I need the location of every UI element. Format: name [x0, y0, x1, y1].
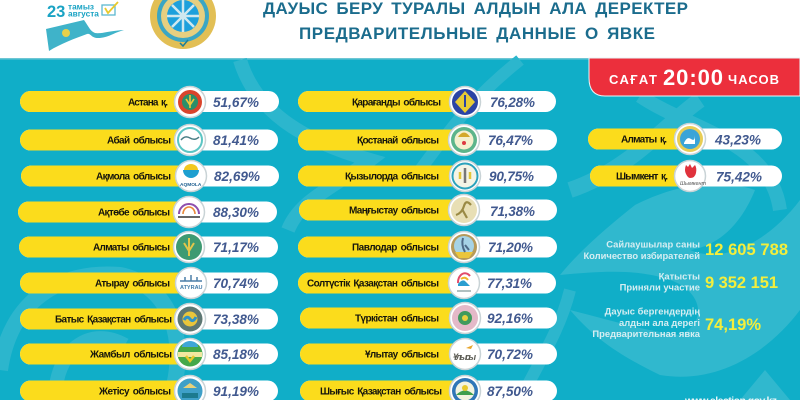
stat: preliminary turnout: Дауыс бергендердің	[605, 306, 700, 316]
stat: preliminary turnout: Предварительная явка	[592, 328, 701, 339]
row: Ақтөбе облысы	[18, 196, 277, 228]
row: Ұлытау облысы	[300, 338, 557, 370]
row: Қостанай облысы	[298, 124, 557, 156]
row: Шығыс Қазақстан облысы	[300, 376, 557, 400]
row: Атырау облысы: ATYRAU	[180, 285, 203, 291]
row: Батыс Қазақстан облысы: 73,38%	[213, 312, 259, 327]
row: Маңғыстау облысы: Маңғыстау облысы	[349, 204, 439, 216]
stat: preliminary turnout: алдын ала дерегі	[619, 317, 700, 328]
row: Қызылорда облысы	[298, 160, 557, 192]
banner: time 20:00: 20:00	[663, 65, 723, 90]
row: Ақмола облысы: 82,69%	[214, 169, 260, 184]
row: Алматы қ.	[588, 124, 782, 154]
row: Алматы қ.: 43,23%	[714, 132, 761, 148]
banner: time 20:00	[589, 58, 800, 96]
row: Жамбыл облысы: 85,18%	[213, 347, 259, 362]
row: Ақмола облысы: AQMOLA	[180, 182, 202, 188]
row: Абай облысы	[20, 124, 278, 156]
stat: voters count: Количество избирателей	[583, 250, 700, 261]
row: Түркістан облысы	[300, 302, 557, 334]
row: Жетісу облысы: 91,19%	[213, 384, 259, 399]
row: Солтүстік Қазақстан облысы: Солтүстік Қазақстан облысы	[307, 278, 439, 290]
row: Солтүстік Қазақстан облысы: 77,31%	[487, 276, 532, 291]
row: Қызылорда облысы: Қызылорда облысы	[345, 170, 439, 182]
banner: time 20:00: САҒАТ	[609, 72, 657, 87]
stat: participated: 9 352 151	[705, 274, 778, 292]
stat: participated	[620, 270, 778, 292]
row: Қостанай облысы: Қостанай облысы	[357, 134, 439, 146]
logo: election date and flag: 23	[47, 3, 65, 21]
row: Ұлытау облысы: 70,72%	[487, 347, 533, 362]
logo: election date and flag: тамыз	[68, 2, 94, 12]
stat: preliminary turnout	[592, 306, 761, 339]
stat: participated: Қатысты	[659, 270, 700, 282]
row: Ақмола облысы: Ақмола облысы	[96, 170, 171, 182]
row: Абай облысы: 81,41%	[213, 133, 259, 148]
stat: voters count	[583, 238, 788, 261]
row: Батыс Қазақстан облысы	[20, 304, 278, 334]
row: Павлодар облысы: Павлодар облысы	[352, 242, 439, 254]
row: Қызылорда облысы: 90,75%	[489, 169, 534, 184]
banner: time 20:00: ЧАСОВ	[728, 72, 779, 87]
title: ПРЕДВАРИТЕЛЬНЫЕ ДАННЫЕ О ЯВКЕ	[299, 24, 655, 43]
title	[263, 0, 688, 43]
row: Солтүстік Қазақстан облысы	[298, 268, 556, 298]
row: Шығыс Қазақстан облысы: Шығыс Қазақстан облысы	[320, 386, 442, 398]
row: Астана қ.: 51,67%	[213, 95, 259, 110]
row: Алматы облысы: Алматы облысы	[93, 242, 170, 254]
stat: participated: Приняли участие	[620, 282, 700, 292]
row: Шымкент қ.: Шымкент қ.	[616, 172, 668, 182]
row: Шымкент қ.: 75,42%	[716, 170, 762, 184]
logo: election commission seal	[150, 0, 216, 49]
row: Астана қ.: Астана қ.	[128, 98, 168, 108]
row: Павлодар облысы	[298, 232, 557, 262]
row: Жамбыл облысы	[20, 338, 278, 370]
stat: voters count: 12 605 788	[705, 241, 788, 259]
logo: election date and flag: августа	[68, 8, 99, 18]
stat: voters count: Сайлаушылар саны	[606, 238, 700, 250]
row: Батыс Қазақстан облысы: Батыс Қазақстан облысы	[55, 314, 172, 326]
row: Жетісу облысы: Жетісу облысы	[98, 386, 171, 398]
row: Абай облысы: Абай облысы	[107, 134, 171, 146]
row: Ақтөбе облысы: Ақтөбе облысы	[98, 206, 170, 218]
row: Маңғыстау облысы: 71,38%	[490, 204, 535, 219]
row: Жамбыл облысы: Жамбыл облысы	[89, 348, 172, 360]
row: Қарағанды облысы: 76,28%	[490, 95, 535, 110]
row: Түркістан облысы: 92,16%	[487, 311, 533, 326]
row: Қарағанды облысы: Қарағанды облысы	[352, 96, 441, 108]
row: Қарағанды облысы	[298, 86, 556, 118]
row: Ақмола облысы	[21, 160, 279, 192]
row: Ұлытау облысы: Ұлысы	[453, 352, 476, 362]
row: Қостанай облысы: 76,47%	[488, 133, 533, 148]
stat: preliminary turnout: 74,19%	[705, 316, 761, 334]
row: Шымкент қ.	[590, 160, 782, 192]
row: Алматы облысы	[19, 232, 278, 262]
row: Ақтөбе облысы: 88,30%	[213, 205, 259, 220]
row: Атырау облысы: 70,74%	[213, 276, 259, 291]
row: Павлодар облысы: 71,20%	[488, 240, 533, 255]
row: Алматы облысы: 71,17%	[213, 240, 259, 255]
row: Шымкент қ.: Шымкент	[680, 181, 707, 187]
logo: election date and flag	[46, 2, 124, 51]
row: Алматы қ.: Алматы қ.	[621, 134, 667, 146]
row: Астана қ.	[20, 86, 279, 118]
row: Түркістан облысы: Түркістан облысы	[355, 312, 439, 324]
row: Жетісу облысы	[20, 376, 278, 400]
row: Атырау облысы: Атырау облысы	[95, 278, 170, 290]
row: Шығыс Қазақстан облысы: 87,50%	[487, 384, 533, 399]
row: Атырау облысы	[20, 268, 278, 298]
row: Ұлытау облысы: Ұлытау облысы	[365, 348, 439, 360]
row: Маңғыстау облысы	[299, 194, 557, 226]
